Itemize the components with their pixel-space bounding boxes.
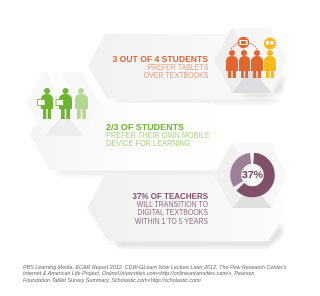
- text block: mobile device statistic: DEVICE FOR LEARNING: [106, 139, 191, 148]
- text block: sources: PBS Learning Media, ECAR Report 2012, CDW-GLearn Now Lecture Later 2012, The Pew Research Center's: [23, 265, 286, 271]
- panel: tablets banner: [88, 34, 280, 103]
- text block: tablets statistic: OVER TEXTBOOKS: [143, 71, 208, 80]
- icon: light green student: [75, 88, 88, 119]
- text block: mobile device statistic: PREFER THEIR OWN MOBILE: [106, 130, 210, 140]
- text block: sources: Foundation Tablet Survey Summary, Scholastic.com<http://scholastic.com/: [23, 278, 201, 284]
- text block: teachers statistic: DIGITAL TEXTBOOKS: [137, 208, 208, 217]
- text block: sources: Internet & American Life Project, OnlineUniversities.com<http://onlineuniversities.com/>, Pearson: [23, 271, 254, 277]
- icon: yellow student with a speech bubble: [264, 38, 276, 78]
- donut percentage label: 37%: [242, 168, 263, 180]
- text block: teachers statistic: WILL TRANSITION TO: [137, 200, 208, 208]
- text block: sources: [23, 265, 286, 284]
- text block: mobile device statistic: [106, 122, 210, 148]
- text block: tablets statistic: 3 OUT OF 4 STUDENTS: [112, 54, 208, 64]
- text block: tablets statistic: PREFER TABLETS: [147, 62, 208, 72]
- text block: teachers statistic: WITHIN 1 TO 5 YEARS: [135, 217, 208, 226]
- text block: tablets statistic: [112, 54, 208, 80]
- panel: tablets hexagon: [214, 28, 287, 98]
- text block: teachers statistic: [132, 190, 208, 226]
- chart: 37 percent donut: [236, 158, 269, 192]
- icon: two green students with tablets: [38, 88, 72, 119]
- panel: teachers banner: [87, 175, 286, 247]
- panel: mobile device banner: [30, 103, 232, 175]
- panel: mobile device hexagon: [26, 72, 99, 136]
- icon: three orange students with a tablet: [226, 37, 263, 78]
- text block: mobile device statistic: 2/3 OF STUDENTS: [106, 122, 184, 132]
- text block: teachers statistic: 37% OF TEACHERS: [132, 190, 208, 200]
- panel: teachers hexagon: [214, 143, 286, 208]
